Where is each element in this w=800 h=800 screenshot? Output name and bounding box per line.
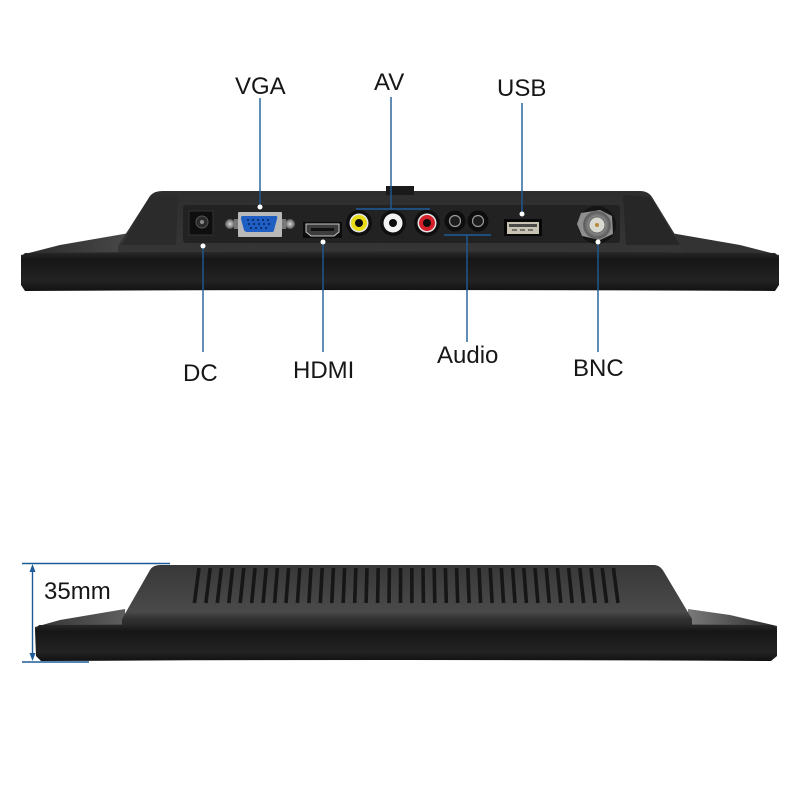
rear housing [118, 191, 682, 258]
arrowhead up [30, 564, 36, 572]
left bezel wedge [35, 609, 125, 630]
leader: AV [356, 97, 430, 209]
right bezel wedge [665, 232, 779, 258]
monitor side view with vents [35, 565, 777, 661]
audio jack left [444, 210, 466, 232]
label: BNC: BNC [573, 355, 624, 382]
thickness dimension [22, 564, 170, 662]
leader: BNC [596, 240, 600, 352]
DC port [189, 211, 213, 235]
side panel shade left [122, 195, 178, 245]
white RCA port [380, 210, 406, 236]
front bezel [21, 252, 779, 291]
leader: VGA [258, 98, 262, 210]
label: DC: DC [183, 360, 218, 387]
leader: USB [520, 103, 524, 216]
red RCA port [414, 210, 440, 236]
label: Audio: Audio [437, 342, 498, 369]
left bezel wedge [21, 232, 135, 258]
switch tab [386, 186, 414, 195]
USB port [504, 219, 542, 236]
label: USB: USB [497, 75, 546, 102]
VGA port [225, 212, 295, 237]
ventilation slots [194, 568, 618, 603]
label: AV: AV [374, 69, 404, 96]
side panel shade right [623, 195, 680, 245]
monitor rear view with ports [21, 186, 779, 291]
leader: DC [200, 244, 206, 352]
label: HDMI: HDMI [293, 357, 354, 384]
rear housing [122, 565, 692, 630]
leader: HDMI [320, 240, 326, 352]
front bezel [35, 624, 777, 661]
recessed port panel [183, 205, 620, 243]
audio jack right [468, 210, 488, 232]
arrowhead down [30, 653, 36, 661]
label: VGA: VGA [235, 73, 286, 100]
label: 35mm: 35mm [44, 578, 111, 605]
leader: Audio [444, 235, 491, 342]
HDMI port [303, 222, 342, 238]
BNC connector [577, 206, 616, 244]
right bezel wedge [688, 609, 777, 630]
yellow RCA port [346, 210, 372, 236]
